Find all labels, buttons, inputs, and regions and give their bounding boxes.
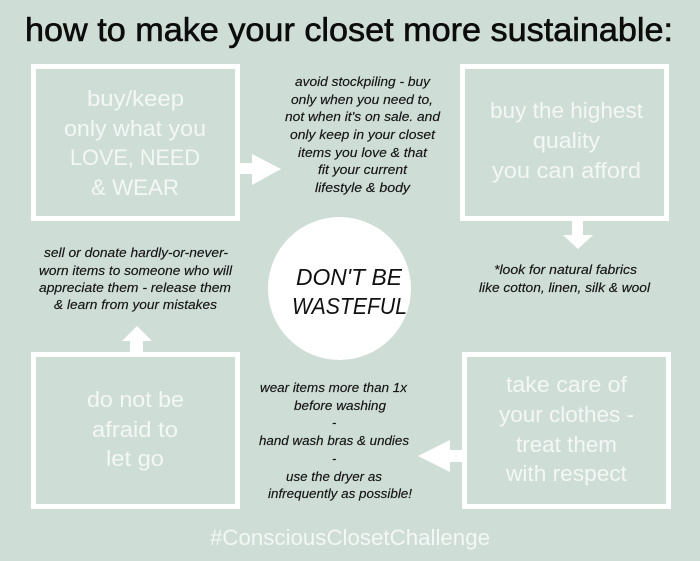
text block: avoid stockpiling: avoid stockpiling - buy (295, 74, 432, 89)
text block: washing tips: wear items more than 1x (260, 380, 408, 395)
panel: buy the highest quality (462, 66, 666, 218)
panel heading: take care of your clothes: take care of (506, 372, 628, 397)
panel: do not be afraid (34, 354, 238, 506)
text block: natural fabrics (479, 262, 651, 295)
arrow: down (563, 221, 593, 249)
panel: buy/keep (34, 66, 238, 218)
text block: sell or donate (39, 245, 233, 312)
text block: avoid stockpiling: not when it's on sale. and (285, 109, 441, 124)
text block: washing tips: hand wash bras & undies (259, 433, 410, 448)
panel heading: take care of your clothes: with respect (505, 461, 628, 486)
panel: take care of your clothes (464, 354, 668, 506)
text block: sell or donate: worn items to someone who will (39, 263, 233, 278)
text block: sell or donate: sell or donate hardly-or-never- (44, 245, 228, 260)
center circle: don't be wasteful: DON'T BE (296, 264, 403, 290)
arrow: up (122, 326, 152, 352)
text block: washing tips (259, 380, 412, 501)
panel heading: take care of your clothes: treat them (516, 432, 617, 457)
panel heading: buy the highest quality: quality (533, 128, 601, 153)
panel heading: buy the highest quality: you can afford (492, 158, 641, 183)
panel heading: do not be afraid (87, 387, 184, 471)
text block: avoid stockpiling (285, 74, 441, 195)
text block: avoid stockpiling: items you love & that (298, 145, 427, 160)
panel heading: buy/keep: buy/keep (87, 86, 184, 111)
hashtag: #ConsciousClosetChallenge (210, 525, 490, 550)
panel heading: buy/keep (64, 86, 206, 200)
text block: sell or donate: & learn from your mistakes (54, 297, 218, 312)
text block: avoid stockpiling: only when you need to, (291, 92, 433, 107)
arrow: right (240, 154, 281, 185)
text block: avoid stockpiling: lifestyle & body (315, 180, 412, 195)
panel heading: buy/keep: LOVE, NEED (70, 145, 200, 170)
text block: natural fabrics: *look for natural fabrics (494, 262, 638, 277)
center circle: don't be wasteful (268, 217, 411, 360)
text block: washing tips: use the dryer as (286, 469, 383, 484)
text block: sell or donate: appreciate them - release them (39, 280, 231, 295)
text block: washing tips: - (332, 451, 336, 466)
text block: washing tips: before washing (294, 398, 386, 413)
arrow: left (418, 440, 463, 472)
panel heading: take care of your clothes (499, 372, 634, 486)
text block: washing tips: infrequently as possible! (268, 486, 412, 501)
text block: avoid stockpiling: fit your current (318, 162, 407, 177)
panel heading: take care of your clothes: your clothes - (499, 402, 634, 427)
panel heading: do not be afraid: afraid to (92, 417, 178, 442)
text block: natural fabrics: like cotton, linen, silk & wool (479, 280, 651, 295)
panel heading: buy/keep: & WEAR (91, 175, 179, 200)
panel heading: buy/keep: only what you (64, 116, 206, 141)
text block: avoid stockpiling: only keep in your closet (290, 127, 435, 142)
text block: washing tips: - (332, 415, 336, 430)
center circle: don't be wasteful: WASTEFUL (292, 293, 407, 319)
panel heading: do not be afraid: do not be (87, 387, 184, 412)
panel heading: do not be afraid: let go (106, 446, 164, 471)
panel heading: buy the highest quality (490, 98, 644, 183)
title: how to make your closet more sustainable: (25, 11, 673, 48)
panel heading: buy the highest quality: buy the highest (490, 98, 644, 123)
